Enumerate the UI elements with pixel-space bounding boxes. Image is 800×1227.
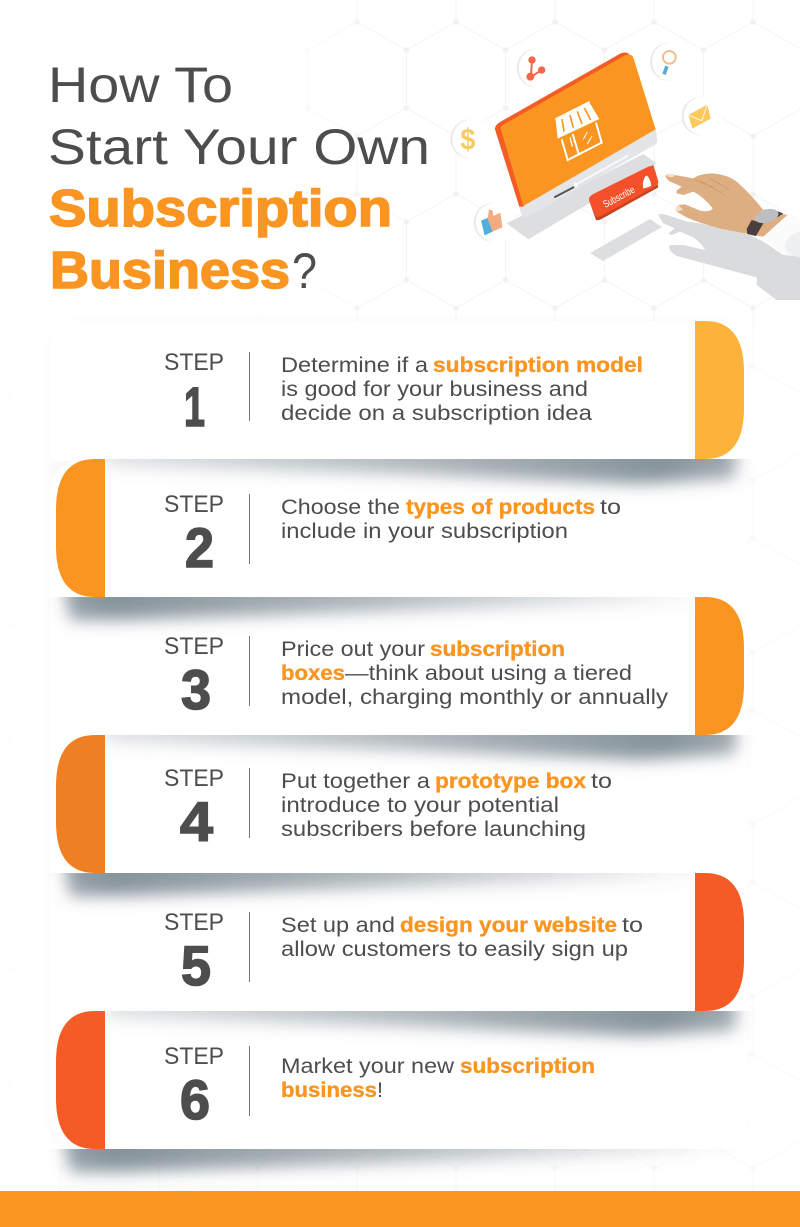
step text: subscription model	[433, 353, 643, 377]
tab	[695, 321, 744, 459]
step text: decide on a subscription idea	[281, 401, 592, 425]
tab	[56, 459, 105, 597]
step text: —think about using a tiered	[345, 661, 632, 685]
step text: prototype box	[435, 769, 586, 793]
step text: Price out your	[281, 637, 425, 661]
icon: thumbs up	[474, 203, 515, 242]
step text: to	[600, 495, 621, 519]
title	[48, 57, 430, 300]
step text: subscription	[430, 637, 565, 661]
icon: envelope	[682, 97, 722, 135]
subscribe button: Subscribe	[602, 185, 637, 211]
step text: !	[377, 1078, 383, 1102]
step text	[281, 1054, 595, 1102]
tab	[56, 735, 105, 873]
screen	[501, 55, 656, 206]
step number: 6	[180, 1068, 210, 1131]
icon: dollar	[450, 119, 492, 159]
step text: types of products	[406, 495, 595, 519]
icon: magnifier	[650, 42, 691, 81]
step text: introduce to your potential	[281, 793, 559, 817]
step text: design your website	[400, 913, 617, 937]
title: How To	[48, 57, 233, 113]
step 4 card	[56, 735, 612, 873]
icon: share	[517, 49, 557, 87]
step 5 card	[164, 873, 744, 1011]
icons ring	[450, 42, 722, 242]
keyboard shadow	[590, 219, 662, 261]
tab	[695, 597, 744, 735]
step text	[281, 769, 612, 841]
tab	[695, 873, 744, 1011]
step text	[281, 637, 668, 709]
step text: include in your subscription	[281, 519, 568, 543]
step text: allow customers to easily sign up	[281, 937, 628, 961]
step text	[281, 913, 643, 961]
step text: subscribers before launching	[281, 817, 586, 841]
hand	[658, 173, 800, 300]
step 3 card	[164, 597, 744, 735]
step 1 card	[164, 321, 744, 459]
step number: 3	[181, 658, 211, 721]
title: Business	[50, 242, 290, 300]
step text: model, charging monthly or annually	[281, 685, 668, 709]
illustration: subscribe hero	[450, 42, 800, 300]
shirt cuff	[763, 215, 800, 257]
step text: business	[281, 1078, 377, 1102]
step number: 1	[184, 375, 205, 438]
step text: subscription	[460, 1054, 595, 1078]
tab	[56, 1011, 105, 1149]
step text: Determine if a	[281, 353, 428, 377]
step label: STEP	[164, 633, 224, 660]
bezel	[518, 128, 657, 217]
monitor	[495, 53, 657, 239]
title: Start Your Own	[48, 119, 430, 175]
step text: Market your new	[281, 1054, 455, 1078]
title: Subscription	[49, 180, 392, 238]
icon: storefront	[555, 101, 602, 160]
step text	[281, 353, 643, 425]
casing edge	[495, 53, 631, 207]
step text: Choose the	[281, 495, 400, 519]
stand shadow	[507, 154, 657, 239]
footer bar	[0, 1191, 800, 1227]
panel: white card stack	[50, 321, 747, 1153]
step number: 5	[181, 934, 211, 997]
step label: STEP	[164, 491, 224, 518]
step 2 card	[56, 459, 621, 597]
subscribe button	[589, 165, 658, 220]
step number: 2	[185, 516, 214, 579]
step text: is good for your business and	[281, 377, 588, 401]
step 6 card	[56, 1011, 595, 1149]
step label: STEP	[164, 765, 224, 792]
hand shadow	[658, 214, 800, 300]
step label: STEP	[164, 909, 224, 936]
title: ?	[292, 243, 317, 299]
step text	[281, 495, 621, 543]
step label: STEP	[164, 1043, 224, 1070]
watch	[747, 206, 783, 236]
step text: Put together a	[281, 769, 430, 793]
step text: Set up and	[281, 913, 395, 937]
step label: STEP	[164, 349, 224, 376]
step number: 4	[180, 790, 213, 853]
icon: dollar: $	[460, 123, 475, 156]
step text: boxes	[281, 661, 345, 685]
card shadows	[62, 440, 738, 1172]
step text: to	[591, 769, 612, 793]
step text: to	[622, 913, 643, 937]
